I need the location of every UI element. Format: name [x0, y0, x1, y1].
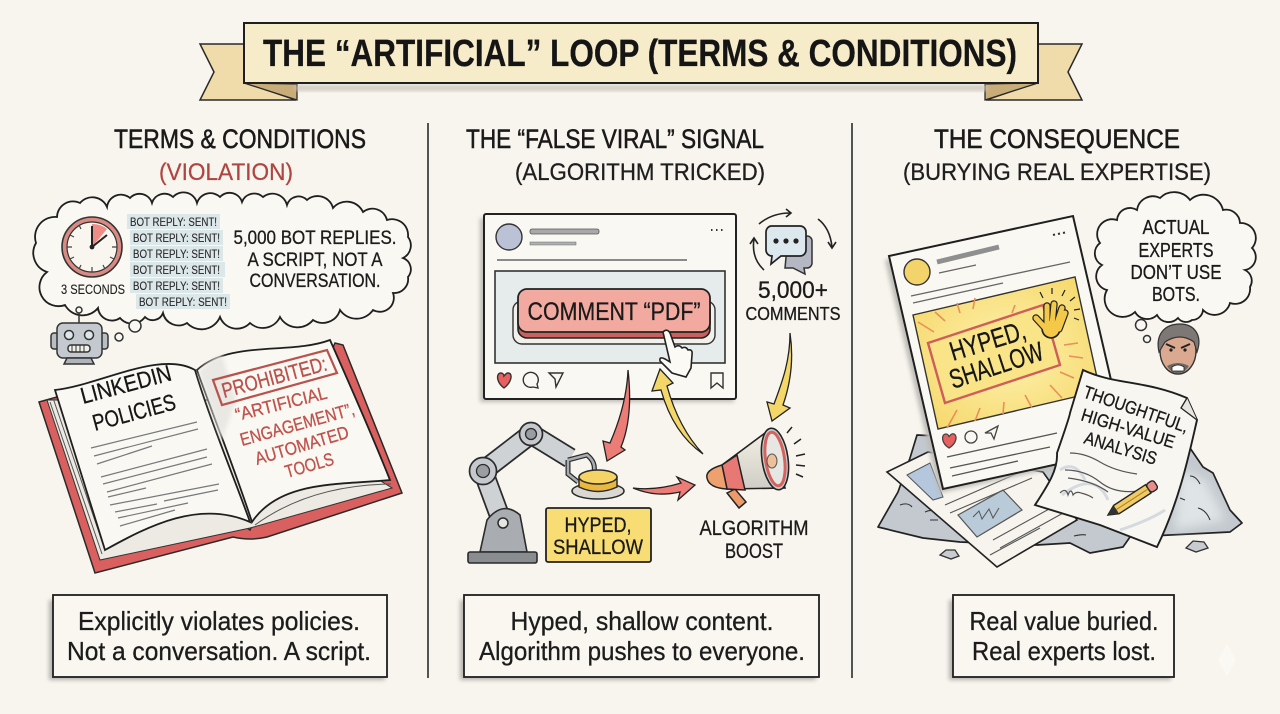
hyped image panel [913, 277, 1100, 429]
illustration: robot arm pressing button [468, 422, 624, 563]
policy lines [91, 422, 219, 526]
label: 5,000+ comments: COMMENTS [746, 303, 840, 324]
heading: terms and conditions: TERMS & CONDITIONS [114, 124, 366, 154]
paper heading: HIGH-VALUE [1079, 405, 1177, 452]
hyped post card [885, 216, 1127, 493]
paper heading: ANALYSIS [1082, 428, 1159, 469]
caption box: real value: Real value buried. [970, 606, 1158, 636]
icon: waving hand [1036, 288, 1080, 337]
caption box: policies: Explicitly violates policies. [78, 606, 360, 636]
small debris [940, 541, 1208, 559]
right page [197, 340, 390, 522]
thought cloud: actual experts: ACTUAL [1142, 217, 1210, 239]
prohibited text [233, 383, 357, 482]
cloud message [234, 228, 396, 292]
rubble pile [878, 435, 1242, 553]
buried newspaper [887, 452, 1077, 567]
caption box: real value [949, 595, 1174, 680]
label: 3 seconds: 3 SECONDS [61, 282, 125, 297]
icon: angry expert face [1158, 324, 1199, 374]
caption box: real value: Real experts lost. [972, 636, 1156, 666]
title text: THE “ARTIFICIAL” LOOP (TERMS & CONDITIONS) [263, 33, 1017, 75]
thought cloud: actual experts: BOTS. [1152, 284, 1200, 306]
bot reply list: BOT REPLY: SENT! [130, 217, 217, 229]
left page [55, 364, 250, 550]
icon: comment bubbles with cycle arrows [750, 209, 836, 274]
post action icons [943, 426, 998, 448]
bot reply list: BOT REPLY: SENT! [139, 297, 227, 309]
label: algorithm boost: ALGORITHM [700, 517, 808, 540]
bot reply list: BOT REPLY: SENT! [133, 265, 220, 277]
cloud message: A SCRIPT, NOT A [248, 250, 383, 271]
arrow: post to robot [603, 370, 630, 461]
label: 5,000+ comments: 5,000+ [758, 277, 828, 304]
bot reply list: BOT REPLY: SENT! [133, 249, 220, 261]
arrow: megaphone to post [652, 369, 703, 454]
thought cloud: actual experts [1095, 192, 1256, 342]
book title: LinkedIn policies: LINKEDIN [78, 360, 174, 409]
heading: the consequence: THE CONSEQUENCE [934, 124, 1180, 154]
panel: false viral signal [460, 124, 840, 680]
panel: the consequence [878, 124, 1256, 680]
cloud message: CONVERSATION. [250, 271, 380, 292]
icon: megaphone [707, 426, 805, 508]
post action icons [498, 372, 723, 388]
comment PDF button: COMMENT “PDF” [528, 298, 700, 326]
title banner [200, 23, 1082, 100]
prohibited text: TOOLS [283, 449, 336, 482]
heading: false viral signal: THE “FALSE VIRAL” SIGNAL [466, 124, 764, 154]
thought cloud: bot replies [33, 192, 411, 329]
label: hyped shallow [546, 508, 651, 562]
hyped image panel: SHALLOW [946, 336, 1047, 395]
thought cloud: actual experts: EXPERTS [1138, 240, 1214, 262]
caption box: policies: Not a conversation. A script. [67, 636, 371, 666]
label: 5,000+ comments [746, 277, 840, 324]
icon: pencil [1105, 480, 1159, 519]
illustration: open rulebook: PROHIBITED: [219, 353, 330, 403]
prohibited text: ENGAGEMENT”, [238, 399, 357, 450]
thought cloud: actual experts: DON’T USE [1130, 262, 1222, 284]
paper heading: THOUGHTFUL, [1081, 382, 1191, 437]
panel: terms and conditions [33, 124, 411, 680]
cloud message: 5,000 BOT REPLIES. [234, 228, 396, 249]
bot reply list [127, 214, 230, 309]
column dividers [428, 123, 852, 678]
label: algorithm boost [700, 517, 808, 563]
subheading: burying real expertise: (BURYING REAL EXPERTISE) [903, 159, 1211, 186]
icon: pointer hand [660, 330, 692, 377]
prohibited text: “ARTIFICIAL [233, 383, 329, 425]
bot reply list: BOT REPLY: SENT! [133, 281, 220, 293]
social post mockup [480, 214, 736, 402]
comment PDF button [513, 289, 715, 344]
paper heading [1079, 382, 1191, 469]
label: algorithm boost: BOOST [725, 540, 783, 563]
subheading: algorithm tricked: (ALGORITHM TRICKED) [515, 159, 765, 186]
hyped image panel: HYPED, [946, 315, 1029, 367]
caption box: hyped content: Algorithm pushes to everyone. [479, 636, 805, 666]
icon: clock [62, 217, 122, 277]
caption box: hyped content: Hyped, shallow content. [510, 606, 774, 636]
bot reply list: BOT REPLY: SENT! [133, 233, 220, 245]
label: hyped shallow: SHALLOW [553, 536, 643, 559]
caption box: policies [49, 595, 387, 680]
crumpled analysis paper [1035, 370, 1197, 547]
prohibited stamp [213, 350, 337, 405]
subheading: violation: (VIOLATION) [159, 159, 293, 186]
book title: LinkedIn policies [78, 360, 178, 436]
arrow: comments to megaphone [767, 333, 792, 421]
illustration: open rulebook [39, 340, 402, 573]
caption box: hyped content [460, 595, 819, 680]
book title: LinkedIn policies: POLICIES [90, 389, 178, 436]
yellow push button [572, 483, 624, 499]
icon: robot [51, 307, 141, 364]
handwritten lines [1060, 453, 1138, 498]
arrow: robot to megaphone [633, 477, 695, 500]
label: hyped shallow: HYPED, [564, 514, 632, 537]
prohibited text: AUTOMATED [252, 422, 351, 469]
